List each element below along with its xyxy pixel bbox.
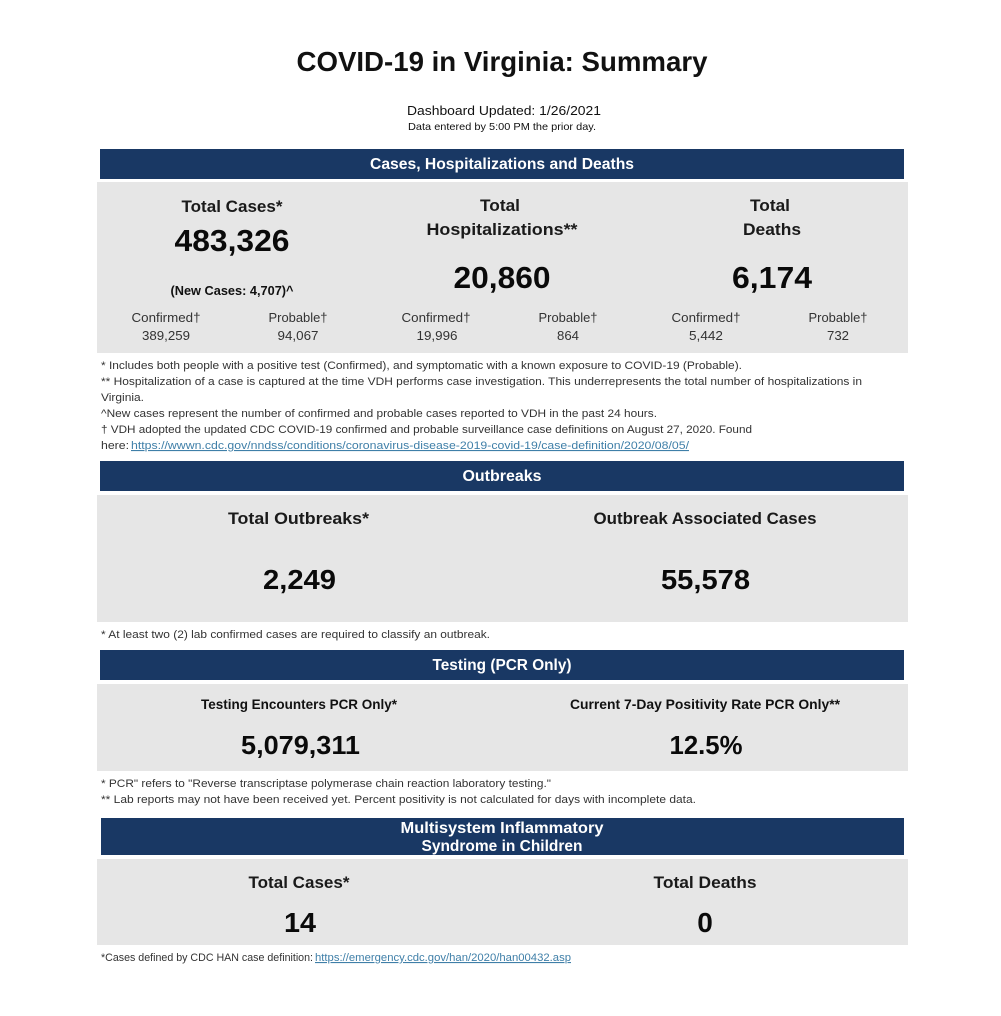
footnotes: cases section: ** Hospitalization of a case is captured at the time VDH performs case investigation. This underrepresents the total number of hospitalizations in xyxy=(101,376,862,388)
total cases breakdown: 389,259 xyxy=(142,328,190,343)
deaths breakdown: 732 xyxy=(827,328,849,343)
MIS-C total cases metric: Total Cases* xyxy=(248,873,350,892)
total outbreaks metric xyxy=(228,509,369,595)
total hospitalizations metric: Total xyxy=(480,196,520,215)
footnotes: testing: ** Lab reports may not have been received yet. Percent positivity is not calculated for days with incomplete data. xyxy=(101,794,696,806)
total outbreaks metric: 2,249 xyxy=(263,564,336,595)
MIS-C total cases metric xyxy=(248,873,350,938)
title: COVID-19 in Virginia: Summary xyxy=(296,46,708,77)
MIS-C total deaths metric: Total Deaths xyxy=(654,873,756,892)
total cases breakdown: Probable† xyxy=(268,310,328,325)
positivity rate metric: Current 7-Day Positivity Rate PCR Only** xyxy=(570,696,841,712)
section header: outbreaks: Outbreaks xyxy=(462,468,542,485)
footnote: MIS-C xyxy=(101,952,571,964)
section header: cases, hospitalizations and deaths xyxy=(100,149,904,179)
total cases metric: 483,326 xyxy=(174,223,290,258)
total deaths metric: 6,174 xyxy=(732,260,813,295)
panel: outbreaks xyxy=(97,495,908,622)
section header: testing: Testing (PCR Only) xyxy=(432,657,572,674)
panel: multisystem inflammatory syndrome in children xyxy=(97,859,908,945)
hospitalizations breakdown: Confirmed† xyxy=(402,310,470,325)
deaths breakdown: Probable† xyxy=(808,310,868,325)
section header: testing xyxy=(100,650,904,680)
positivity rate metric: 12.5% xyxy=(670,730,742,760)
hospitalizations breakdown: 19,996 xyxy=(416,328,458,343)
total outbreaks metric: Total Outbreaks* xyxy=(228,509,369,528)
dashboard update date xyxy=(407,103,601,133)
total hospitalizations metric xyxy=(426,196,578,295)
total cases breakdown: Confirmed† xyxy=(132,310,200,325)
footnotes: testing: * PCR" refers to "Reverse transcriptase polymerase chain reaction laboratory testing." xyxy=(101,778,551,790)
testing encounters metric: Testing Encounters PCR Only* xyxy=(201,696,398,712)
total cases breakdown xyxy=(132,310,328,343)
total deaths metric: Deaths xyxy=(743,220,801,239)
deaths breakdown: Confirmed† xyxy=(672,310,740,325)
outbreak associated cases metric: Outbreak Associated Cases xyxy=(594,509,816,528)
MIS-C total deaths metric xyxy=(654,873,756,938)
footnotes: cases section: Virginia. xyxy=(101,392,144,404)
dashboard update date: Dashboard Updated: 1/26/2021 xyxy=(407,103,601,118)
total cases metric: Total Cases* xyxy=(182,197,283,216)
total deaths metric xyxy=(732,196,813,295)
panel: testing xyxy=(97,684,908,771)
footnotes: cases section: https://wwwn.cdc.gov/nndss/conditions/coronavirus-disease-2019-covid-19/case-definition/2020/08/05/ xyxy=(131,440,690,452)
outbreak associated cases metric xyxy=(594,509,816,595)
MIS-C total deaths metric: 0 xyxy=(697,907,713,938)
section header: multisystem inflammatory syndrome in children: Multisystem Inflammatory xyxy=(400,820,604,837)
footnotes: cases section xyxy=(101,360,862,452)
total cases metric: (New Cases: 4,707)^ xyxy=(170,284,294,298)
total cases breakdown: 94,067 xyxy=(278,328,318,343)
dashboard update date: Data entered by 5:00 PM the prior day. xyxy=(408,121,596,133)
testing encounters metric xyxy=(201,696,398,760)
positivity rate metric xyxy=(570,696,841,760)
footnote: MIS-C: *Cases defined by CDC HAN case definition: xyxy=(101,952,313,964)
footnotes: cases section: † VDH adopted the updated CDC COVID-19 confirmed and probable surveillance case definitions on August 27, 2020. Found xyxy=(101,424,752,436)
footnotes: cases section: ^New cases represent the number of confirmed and probable cases reported to VDH in the past 24 hours. xyxy=(101,408,657,420)
total hospitalizations metric: 20,860 xyxy=(454,260,550,295)
hospitalizations breakdown: Probable† xyxy=(538,310,598,325)
section header: multisystem inflammatory syndrome in children xyxy=(101,818,904,855)
footnotes: cases section: * Includes both people with a positive test (Confirmed), and symptomatic with a known exposure to COVID-19 (Probable). xyxy=(101,360,742,372)
panel: cases, hospitalizations and deaths xyxy=(97,182,908,353)
footnote: MIS-C: https://emergency.cdc.gov/han/2020/han00432.asp xyxy=(315,952,571,964)
footnote: outbreaks: * At least two (2) lab confirmed cases are required to classify an outbreak. xyxy=(101,629,490,641)
total deaths metric: Total xyxy=(750,196,790,215)
outbreak associated cases metric: 55,578 xyxy=(661,564,750,595)
footnotes: testing xyxy=(101,778,696,806)
hospitalizations breakdown: 864 xyxy=(557,328,579,343)
footnotes: cases section: here: xyxy=(101,440,129,452)
testing encounters metric: 5,079,311 xyxy=(241,730,360,760)
section header: outbreaks xyxy=(100,461,904,491)
section header: multisystem inflammatory syndrome in children: Syndrome in Children xyxy=(422,838,582,855)
hospitalizations breakdown xyxy=(402,310,598,343)
MIS-C total cases metric: 14 xyxy=(284,907,316,938)
total hospitalizations metric: Hospitalizations** xyxy=(426,220,578,239)
deaths breakdown: 5,442 xyxy=(689,328,723,343)
deaths breakdown xyxy=(672,310,868,343)
total cases metric xyxy=(170,197,294,298)
section header: cases, hospitalizations and deaths: Cases, Hospitalizations and Deaths xyxy=(370,156,634,173)
